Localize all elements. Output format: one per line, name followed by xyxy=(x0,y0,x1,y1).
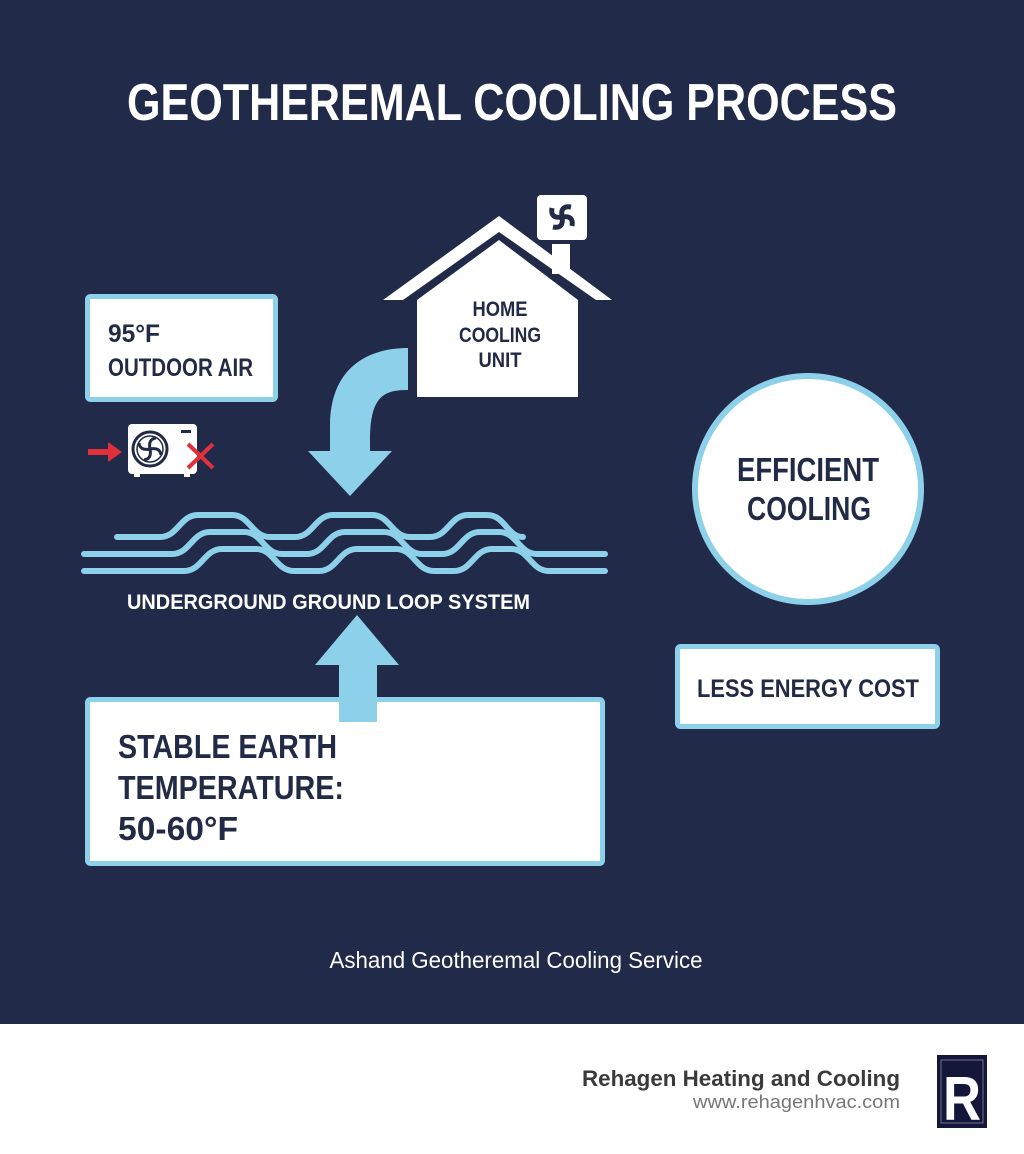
logo: R xyxy=(943,1065,981,1134)
panel: stable earth temperature xyxy=(88,697,602,864)
brand text: www.rehagenhvac.com xyxy=(692,1092,900,1112)
circle: efficient cooling: EFFICIENT xyxy=(737,451,879,488)
circle: efficient cooling xyxy=(695,376,921,602)
icon: house with cooling unit xyxy=(383,195,612,397)
circle: efficient cooling: COOLING xyxy=(747,490,871,527)
ground loop pipes xyxy=(84,515,605,571)
panel: outdoor air: OUTDOOR AIR xyxy=(108,354,253,382)
brand text: Rehagen Heating and Cooling xyxy=(582,1066,900,1091)
panel: less energy cost xyxy=(678,646,938,726)
icon: house with cooling unit: HOME xyxy=(472,298,528,321)
panel: stable earth temperature: STABLE EARTH xyxy=(118,728,337,765)
icon: house with cooling unit: COOLING xyxy=(459,324,541,347)
panel: stable earth temperature: 50-60°F xyxy=(118,810,238,847)
brand text xyxy=(582,1066,900,1112)
arrow: up from earth xyxy=(315,615,399,722)
footer caption: Ashand Geotheremal Cooling Service xyxy=(330,947,702,973)
label: ground loop: UNDERGROUND GROUND LOOP SYSTEM xyxy=(127,591,530,614)
arrow: curved down from house xyxy=(308,348,408,496)
icon: outdoor AC unit with red arrow and X xyxy=(88,424,213,477)
icon: house with cooling unit: UNIT xyxy=(478,349,522,372)
panel: stable earth temperature: TEMPERATURE: xyxy=(118,769,344,806)
panel: less energy cost: LESS ENERGY COST xyxy=(697,675,919,703)
panel: outdoor air: 95°F xyxy=(108,320,160,348)
panel: outdoor air xyxy=(88,296,276,400)
